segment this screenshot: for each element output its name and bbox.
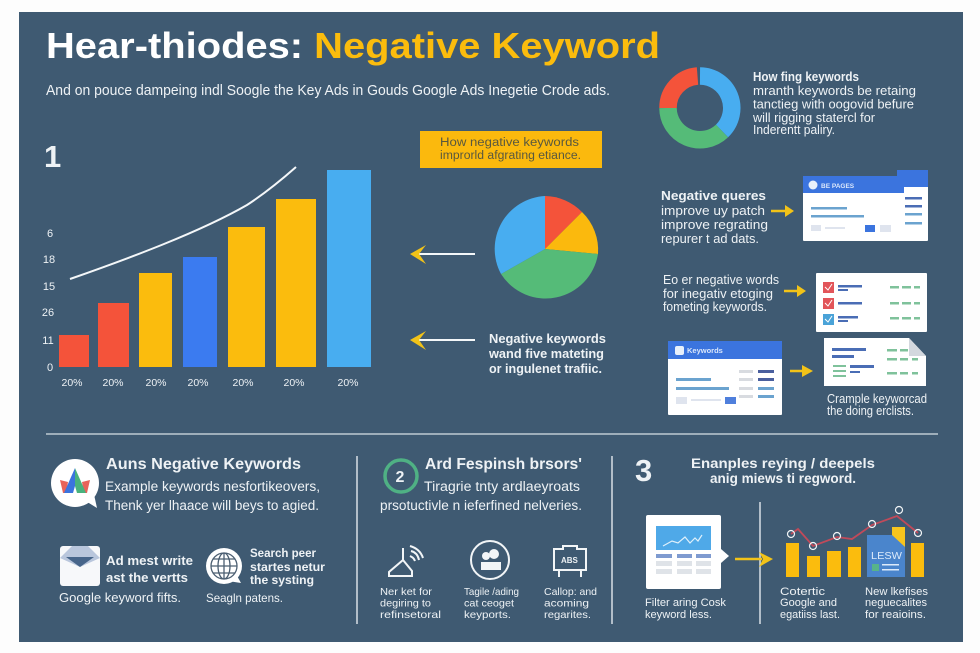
text: how keywords: How fing keywords [753, 70, 859, 84]
y axis labels: 6 [47, 228, 53, 240]
text: column two: keyports. [464, 609, 511, 621]
icon: ticket board [554, 546, 586, 577]
text: column two: cat ceoget [464, 598, 514, 610]
x axis labels: 20% [283, 377, 305, 389]
subtitle: And on pouce dampeing indl Soogle the Key Ads in Gouds Google Ads Inegetie Crode ads. [46, 83, 610, 99]
y axis labels: 0 [47, 362, 53, 374]
icon: globe [206, 548, 242, 584]
window: keywords table: Keywords [687, 346, 723, 355]
text: column one: refinsetoral [380, 609, 441, 621]
text: google keyword: Google keyword fifts. [59, 590, 181, 605]
x axis labels: 20% [337, 377, 359, 389]
text: column two [464, 586, 519, 621]
heading: negative keywords: Auns Negative Keywords [106, 456, 301, 473]
text: negative keywords: or ingulenet trafiic. [489, 361, 602, 376]
combo chart: LESW [871, 550, 902, 562]
arrow: queries to window [771, 205, 794, 217]
arrow: words to checklist [784, 285, 806, 297]
text: how keywords: mranth keywords be retaing [753, 84, 916, 98]
text: column two: Tagile /ading [464, 586, 519, 598]
text: column three [544, 586, 597, 621]
combo chart [786, 506, 924, 577]
text: search patterns: Seagln patens. [206, 591, 283, 605]
y axis labels [42, 228, 55, 374]
text: negative queries: improve regrating [661, 217, 768, 232]
title: Hear-thiodes: Negative Keyword [46, 25, 660, 66]
text: negative queries: Negative queres [661, 188, 766, 203]
y axis labels: 11 [42, 335, 54, 347]
text: negative queries [661, 188, 768, 246]
icon: ads logo speech bubble [51, 459, 99, 508]
window: keywords search [803, 176, 904, 241]
icon: number 2 ring [385, 460, 417, 492]
text: how keywords: Inderentt paliry. [753, 123, 835, 137]
icon: ticket board: ABS [561, 556, 579, 565]
x axis labels: 20% [232, 377, 254, 389]
text: example keywords: Crample keyworcad [827, 392, 927, 406]
text: filter [645, 597, 727, 621]
text: ad write [106, 553, 193, 585]
text: new lifefises: New lkefises [865, 586, 929, 598]
text: negative words: Eo er negative words [663, 273, 779, 287]
text: search peer [250, 546, 325, 587]
icon: report window [646, 515, 729, 589]
text: filter: Filter aring Cosk [645, 597, 727, 609]
window: keywords search: BE PAGES [821, 183, 855, 190]
text: search peer: Search peer [250, 546, 316, 560]
y axis labels: 18 [43, 254, 55, 266]
y axis labels: 15 [43, 281, 55, 293]
text: section 2 description: Tiragrie tnty ardlaeyroats [424, 479, 580, 494]
callout: yellow box: improrld afgrating etiance. [440, 150, 581, 162]
text: example keywords description: Example keywords nesfortikeovers, [105, 479, 320, 494]
text: column three: acoming [544, 598, 589, 610]
text: how keywords: tanctieg with oogovid befure [753, 98, 914, 112]
text: new lifefises: for reaioins. [865, 609, 926, 621]
text: coterric: egatiiss last. [780, 609, 840, 621]
arrow: pie to chart [410, 245, 475, 264]
text: column one [380, 586, 441, 621]
window: keywords table [668, 341, 782, 415]
donut chart [668, 76, 732, 140]
text: coterric: Google and [780, 597, 837, 609]
heading: section 3 [691, 455, 875, 486]
icon: envelope [60, 546, 100, 586]
icon: number 2 ring: 2 [396, 469, 405, 486]
text: negative words: for inegativ etoging [663, 287, 773, 301]
icon: person in circle [471, 541, 509, 579]
text: negative words: fometing keywords. [663, 300, 767, 314]
text: example keywords description: Thenk yer lhaace will beys to agied. [105, 498, 319, 513]
arrow: table to document [790, 365, 813, 377]
text: column three: Callop: and [544, 586, 597, 598]
callout: yellow box [420, 131, 602, 168]
section number 3: 3 [635, 453, 652, 488]
text: coterric [780, 586, 840, 621]
section number 1: 1 [44, 139, 61, 174]
icon: signal tower [389, 546, 423, 576]
x axis labels: 20% [187, 377, 209, 389]
text: negative keywords: wand five mateting [488, 346, 604, 361]
text: how keywords [752, 70, 916, 137]
text: negative keywords: Negative keywords [489, 331, 606, 346]
card: document [824, 338, 926, 386]
text: example keywords: the doing erclists. [827, 404, 914, 418]
card: checklist [816, 273, 927, 332]
text: search peer: startes netur [250, 560, 325, 574]
callout: yellow box: How negative keywords [440, 137, 579, 149]
x axis labels: 20% [145, 377, 167, 389]
text: ad write: ast the vertts [106, 570, 188, 585]
arrow: text to chart [410, 331, 475, 350]
text: new lifefises: neguecalites [865, 597, 927, 609]
text: column three: regarites. [544, 609, 591, 621]
window: back panel [897, 170, 928, 241]
pie chart [495, 196, 598, 299]
trend line [70, 167, 296, 279]
text: new lifefises [865, 586, 929, 621]
text: coterric: Cotertic [780, 586, 826, 598]
text: how keywords: will rigging statercl for [752, 111, 875, 125]
text: negative queries: improve uy patch [661, 203, 765, 218]
text: negative queries: repurer t ad dats. [661, 231, 759, 246]
x axis labels: 20% [61, 377, 83, 389]
x axis labels [61, 377, 359, 389]
heading: section 2: Ard Fespinsh brsors' [425, 456, 582, 473]
text: filter: keyword less. [645, 609, 712, 621]
bar chart [42, 167, 371, 389]
y axis labels: 26 [42, 307, 54, 319]
text: negative words [663, 273, 779, 314]
text: negative keywords [488, 331, 606, 376]
text: example keywords [827, 392, 927, 418]
text: search peer: the systing [250, 573, 314, 587]
text: section 2 description [380, 479, 582, 513]
arrow: report to chart [735, 552, 773, 567]
text: column one: degiring to [380, 598, 431, 610]
text: section 2 description: prsotuctivle n ieferfined nelveries. [380, 498, 582, 513]
x axis labels: 20% [102, 377, 124, 389]
text: ad write: Ad mest write [106, 553, 193, 568]
heading: section 3: anig miews ti regword. [710, 470, 856, 486]
text: column one: Ner ket for [380, 586, 433, 598]
heading: section 3: Enanples reying / deepels [691, 455, 875, 471]
text: example keywords description [105, 479, 320, 513]
